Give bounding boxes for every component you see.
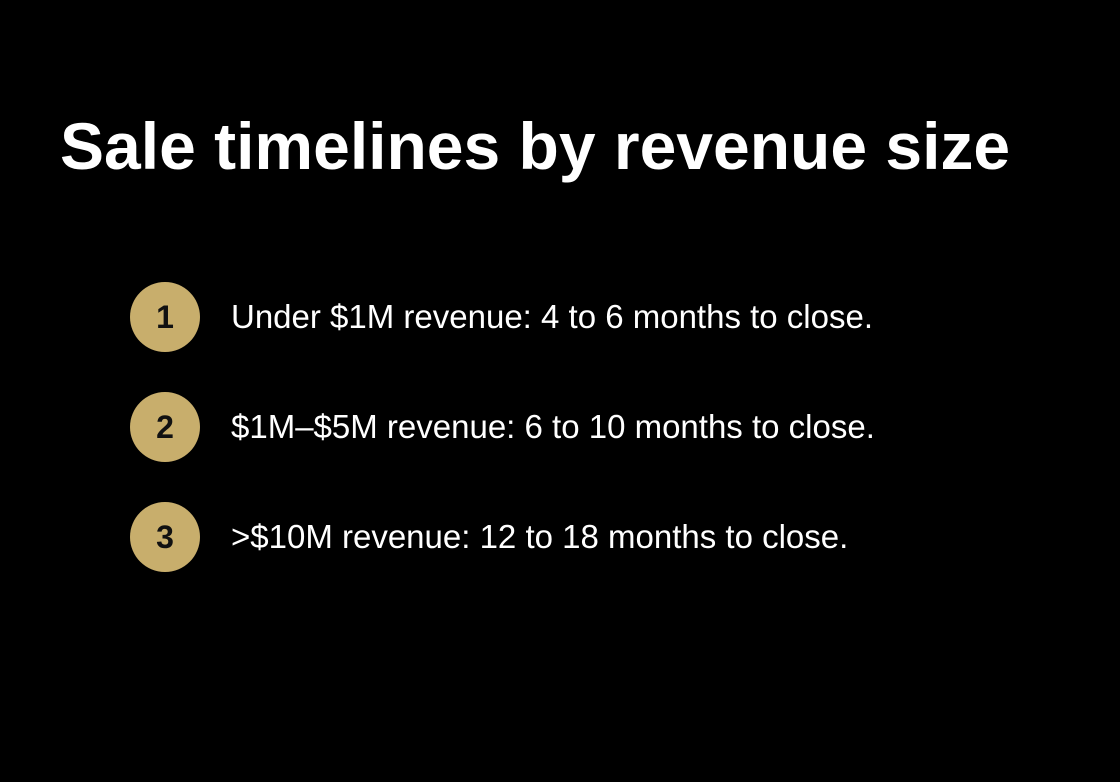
icon: number 1: 1 bbox=[156, 299, 174, 335]
icon: number 1 bbox=[130, 282, 200, 352]
text 3: >$10M revenue: 12 to 18 months to close. bbox=[231, 518, 848, 555]
icon: number 2: 2 bbox=[156, 409, 174, 445]
icon: number 3: 3 bbox=[156, 519, 174, 555]
text 1: Under $1M revenue: 4 to 6 months to close. bbox=[231, 298, 873, 335]
item 1 bbox=[130, 282, 873, 352]
icon: number 2 bbox=[130, 392, 200, 462]
item 2 bbox=[130, 392, 875, 462]
icon: number 3 bbox=[130, 502, 200, 572]
item 3 bbox=[130, 502, 848, 572]
title: Sale timelines by revenue size bbox=[60, 109, 1010, 183]
text 2: $1M–$5M revenue: 6 to 10 months to close. bbox=[231, 408, 875, 445]
